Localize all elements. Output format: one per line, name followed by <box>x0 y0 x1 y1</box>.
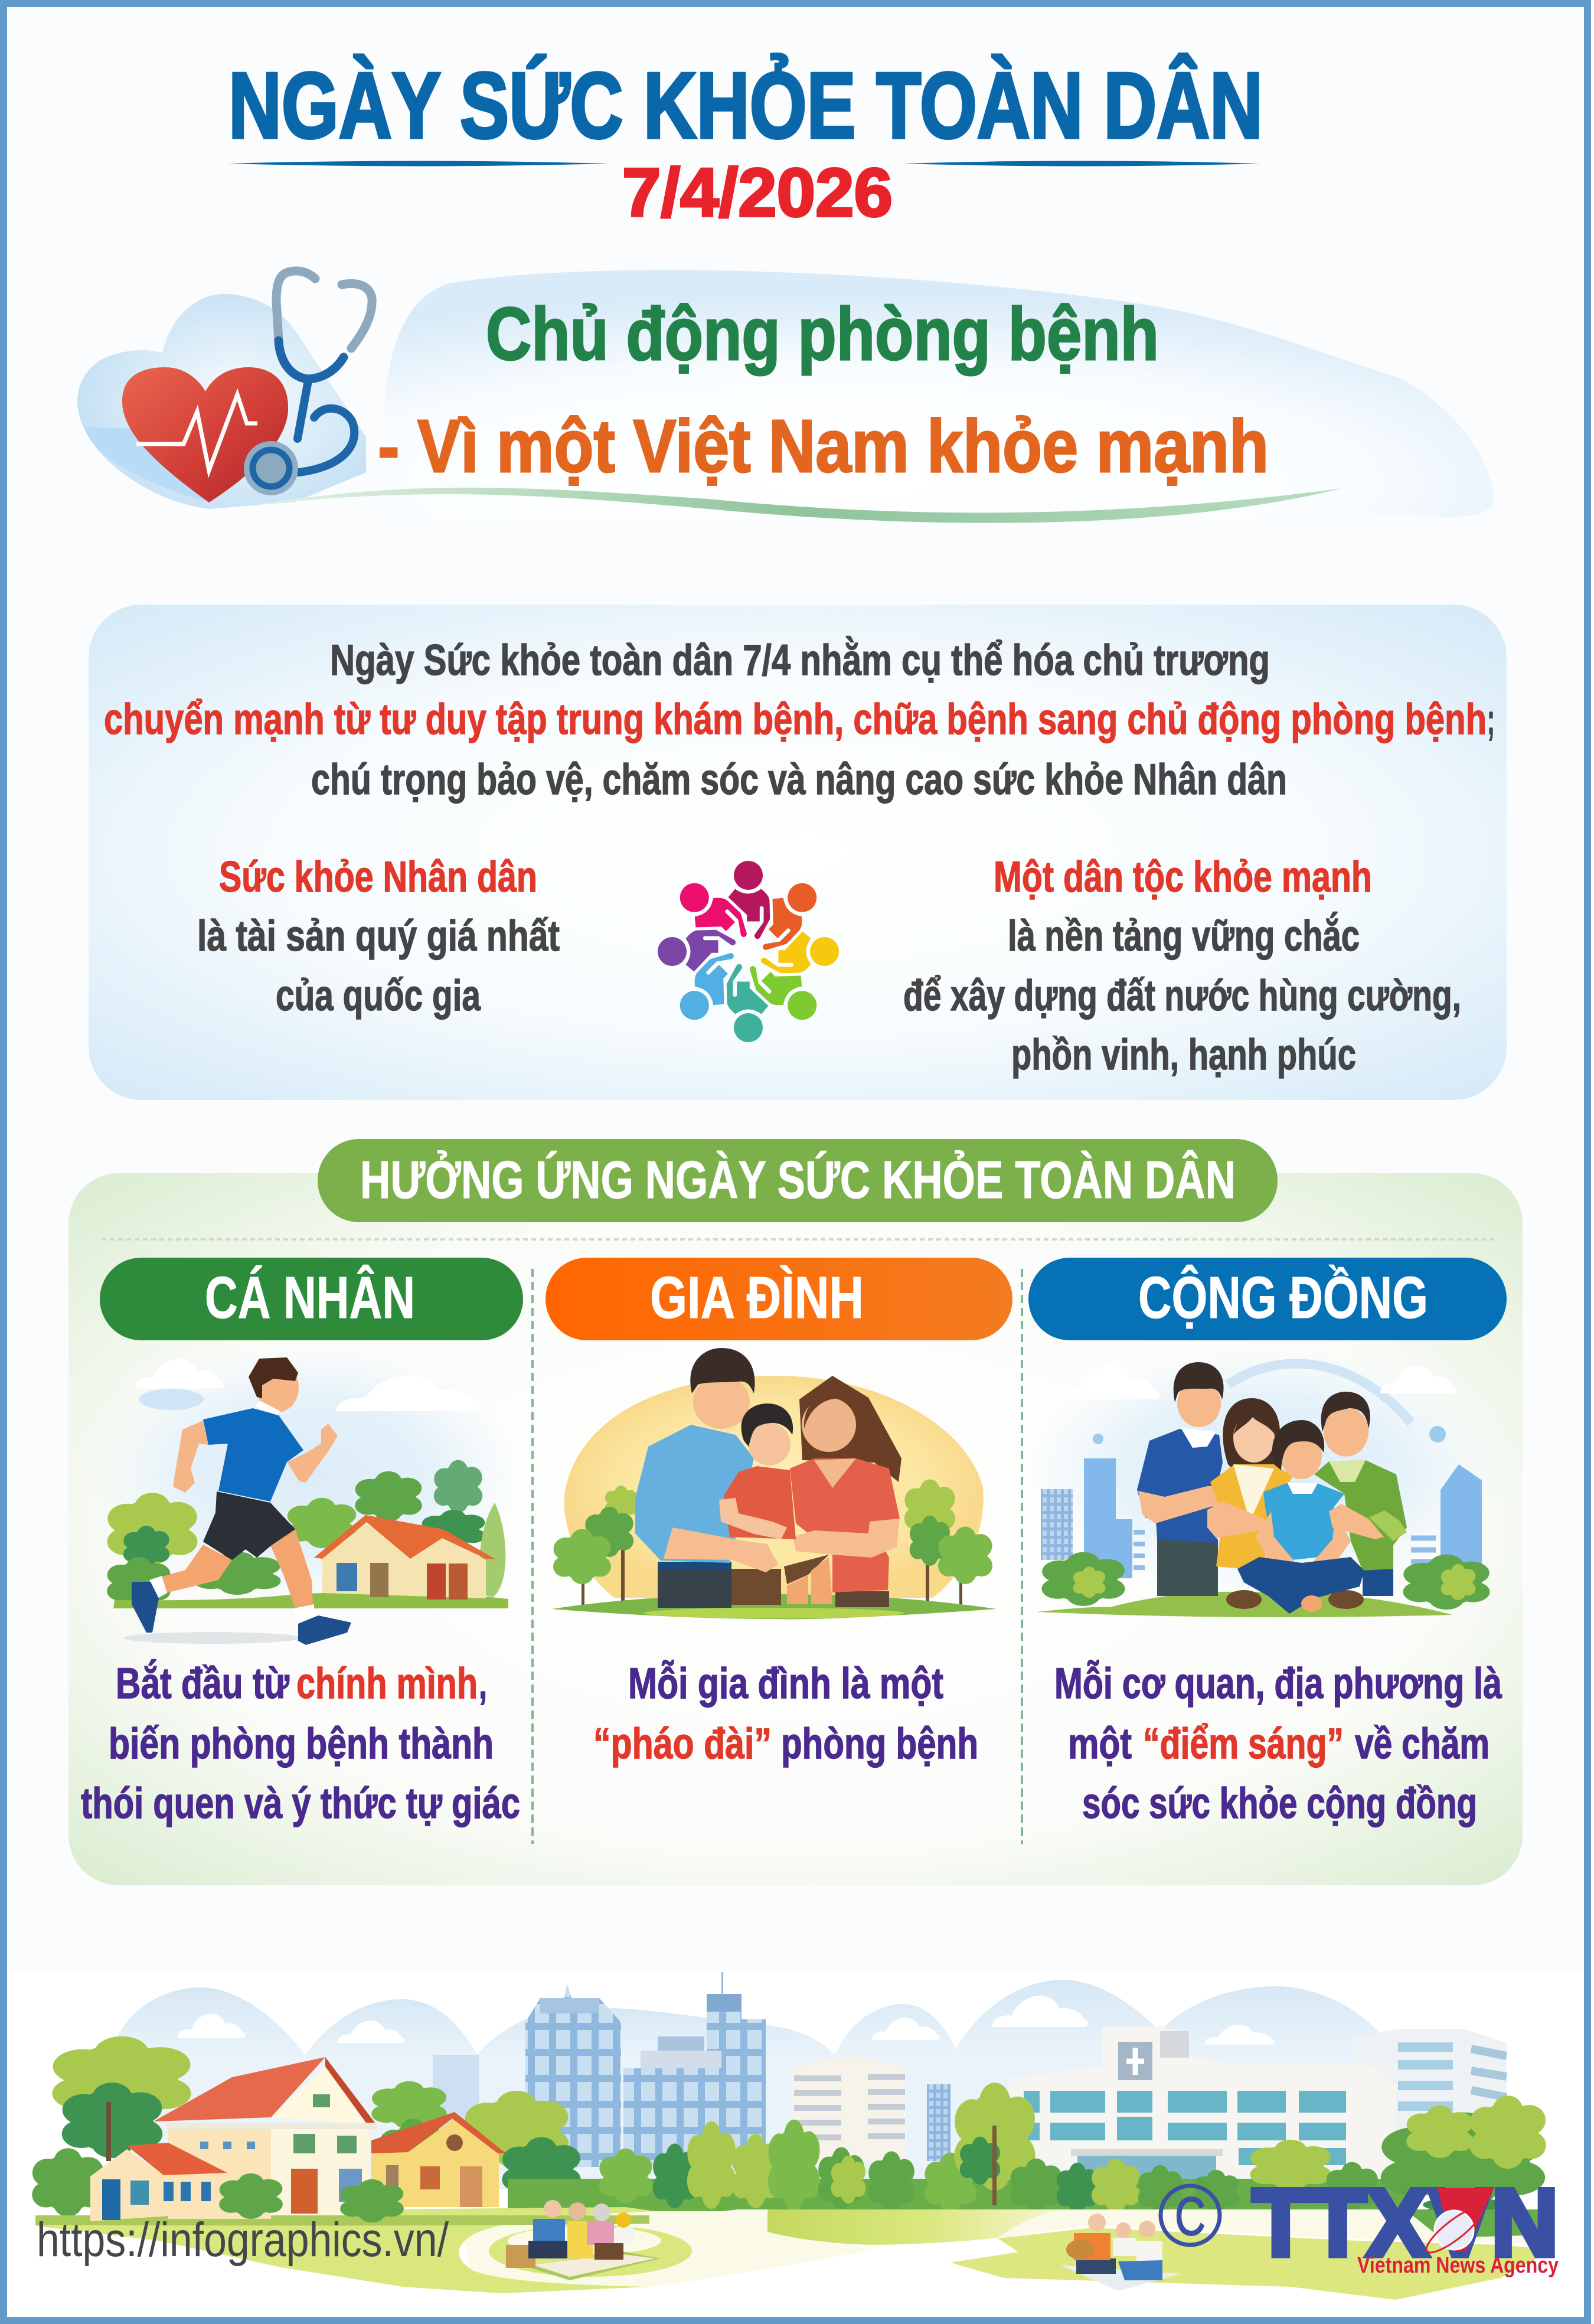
text: individual: thói quen và ý thức tự giác <box>81 1780 520 1827</box>
boy <box>1226 1420 1364 1614</box>
left cloud <box>77 294 366 509</box>
text: community: sóc sức khỏe cộng đồng <box>1082 1780 1477 1827</box>
green swoosh <box>249 488 1342 523</box>
skyline right <box>1411 1464 1482 1574</box>
agency name: Vietnam News Agency <box>1357 2253 1559 2278</box>
text: family: “pháo đài” <box>593 1720 772 1768</box>
title rule left <box>228 161 608 167</box>
text: individual: biến phòng bệnh thành <box>109 1720 494 1768</box>
clouds <box>178 1996 1274 2045</box>
illustration: community <box>1021 1343 1505 1617</box>
icon: stethoscope <box>250 271 372 489</box>
pulse line <box>136 394 257 471</box>
runner figure <box>132 1357 351 1645</box>
text: community: “điểm sáng” <box>1143 1720 1344 1768</box>
footer city illustration <box>7 1970 1584 2317</box>
picnic group one <box>506 2200 660 2280</box>
copyright mark <box>1161 2186 1220 2247</box>
column: family <box>546 1258 1012 1768</box>
subtitle line 1: Chủ động phòng bệnh <box>486 292 1159 376</box>
skyline left <box>1041 1458 1145 1578</box>
TTXVN logo: TTXVN <box>1252 2169 1559 2276</box>
left statement: là tài sản quý giá nhất <box>197 912 560 960</box>
text: individual: Bắt đầu từ <box>116 1660 289 1708</box>
source url: https://infographics.vn/ <box>37 2213 449 2267</box>
pill: individual <box>100 1258 523 1340</box>
intro paragraph <box>104 637 1495 804</box>
intro paragraph: Ngày Sức khỏe toàn dân 7/4 nhằm cụ thể hóa chủ trương <box>330 637 1270 684</box>
hero banner <box>77 270 1494 523</box>
column: individual <box>81 1258 525 1827</box>
column: community <box>1021 1258 1507 1827</box>
logo orbit <box>1421 2202 1487 2258</box>
section heading pill: HƯỞNG ỨNG NGÀY SỨC KHỎE TOÀN DÂN <box>360 1150 1236 1210</box>
section heading pill <box>318 1139 1278 1222</box>
background trees <box>32 2036 1546 2220</box>
copyright mark: C <box>1175 2186 1206 2247</box>
picnic group two <box>1060 2214 1181 2291</box>
icon: circle of people <box>658 861 839 1042</box>
pill: family <box>546 1258 1012 1340</box>
right statement <box>903 853 1461 1079</box>
house <box>314 1515 496 1600</box>
pill: family: GIA ĐÌNH <box>650 1265 864 1331</box>
banner cloud <box>378 270 1494 520</box>
text: community: về chăm <box>1355 1720 1490 1768</box>
big house <box>153 2057 377 2219</box>
logo red V arm <box>1438 2188 1494 2251</box>
left cloud lower band <box>84 427 207 502</box>
intro paragraph: chú trọng bảo vệ, chăm sóc và nâng cao sức khỏe Nhân dân <box>311 756 1287 804</box>
right statement: Một dân tộc khỏe mạnh <box>994 853 1372 901</box>
cream building <box>791 2056 950 2161</box>
panel: introduction <box>89 605 1507 1100</box>
text: community: một <box>1068 1720 1132 1768</box>
text: family <box>593 1660 978 1768</box>
pill: community <box>1028 1258 1507 1340</box>
right statement: là nền tảng vững chắc <box>1008 912 1360 960</box>
left statement: của quốc gia <box>276 972 481 1020</box>
lawns and path <box>35 2207 1553 2300</box>
panel: responses <box>68 1139 1523 1885</box>
man right <box>1314 1392 1407 1596</box>
text: individual <box>81 1660 520 1827</box>
mother <box>790 1376 901 1607</box>
pill: individual: CÁ NHÂN <box>205 1264 415 1331</box>
green panel background <box>68 1173 1523 1885</box>
intro paragraph: ; <box>1487 696 1495 743</box>
illustration: family <box>552 1348 997 1619</box>
text: individual: , <box>479 1660 487 1708</box>
logo globe <box>1435 2211 1474 2250</box>
text: family: Mỗi gia đình là một <box>628 1660 943 1708</box>
text: community <box>1054 1660 1502 1827</box>
date: 7/4/2026 <box>622 154 893 231</box>
icon: heart <box>122 367 288 502</box>
subtitle line 2: - Vì một Việt Nam khỏe mạnh <box>378 404 1269 488</box>
houses <box>90 2057 506 2222</box>
father <box>635 1348 778 1608</box>
title text: NGÀY SỨC KHỎE TOÀN DÂN <box>228 54 1263 158</box>
hospital <box>1008 2026 1396 2191</box>
text: family: phòng bệnh <box>781 1720 978 1768</box>
city towers <box>433 1972 766 2185</box>
small house <box>90 2143 227 2221</box>
right tower <box>1354 2029 1507 2161</box>
woman <box>1207 1398 1292 1571</box>
left statement <box>197 853 560 1020</box>
child <box>664 1403 832 1605</box>
title <box>228 54 1263 231</box>
text: individual: chính mình <box>296 1660 478 1708</box>
man left <box>1137 1362 1229 1596</box>
right statement: phồn vinh, hạnh phúc <box>1011 1031 1356 1079</box>
left statement: Sức khỏe Nhân dân <box>219 853 537 901</box>
panel background <box>89 605 1507 1100</box>
title rule right <box>903 161 1260 167</box>
pill: community: CỘNG ĐỒNG <box>1138 1265 1428 1331</box>
illustration: runner <box>89 1341 525 1645</box>
sky arches <box>110 1980 1403 2189</box>
yellow house <box>371 2112 506 2207</box>
